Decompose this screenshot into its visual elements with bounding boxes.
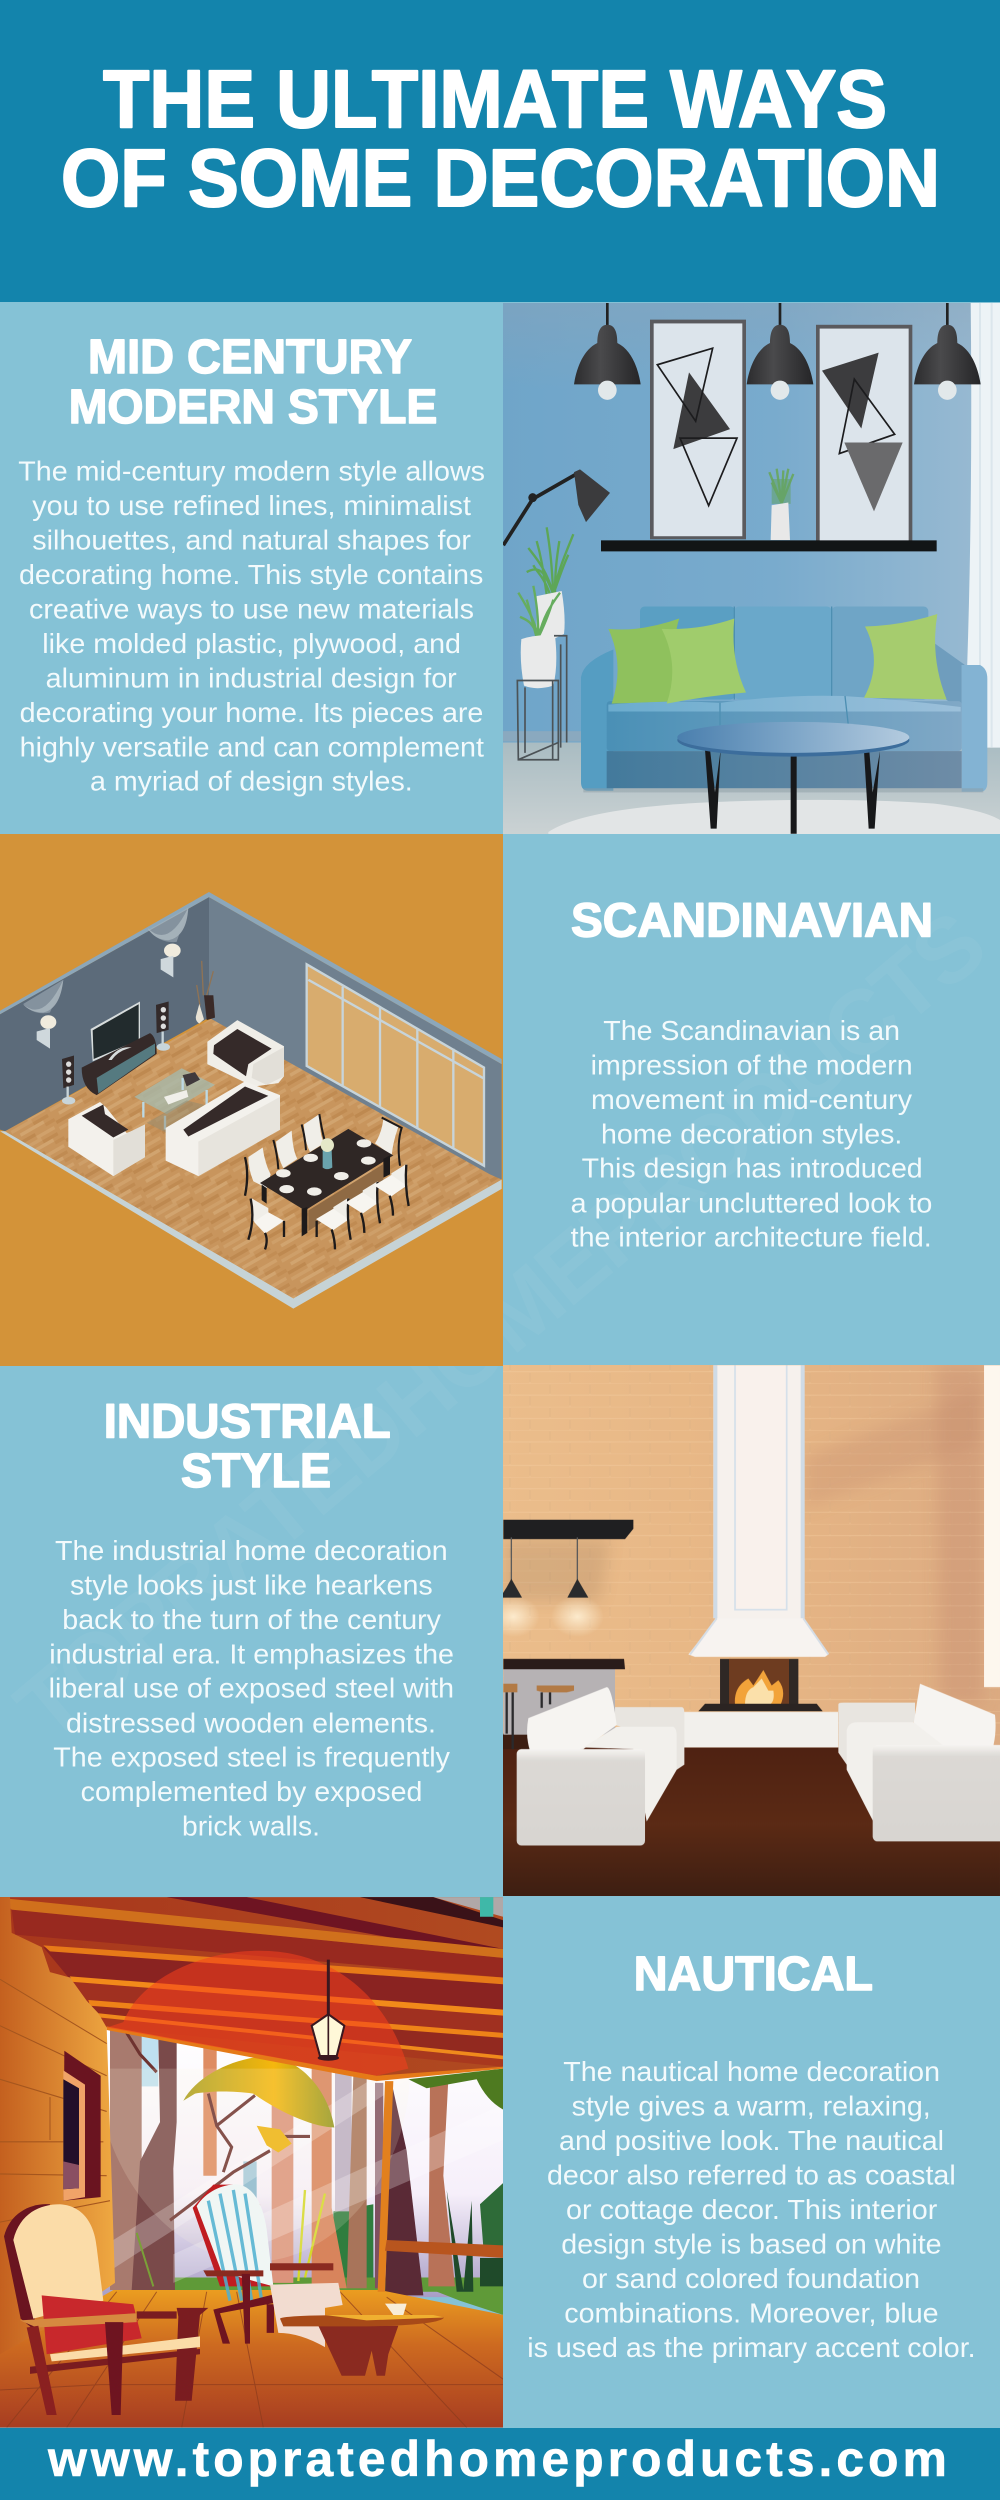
framed art left: [650, 320, 746, 539]
red sun glow over roof: [107, 1951, 408, 2076]
body text: industrial: complemented by exposed: [81, 1776, 422, 1807]
chimney: [688, 1365, 828, 1657]
back row chairs: [245, 1114, 402, 1196]
heading: industrial style: INDUSTRIAL: [104, 1396, 391, 1448]
heading: industrial style: STYLE: [181, 1445, 331, 1498]
body text: scandinavian: [571, 1015, 932, 1253]
armchair lower: [68, 1102, 145, 1176]
floor lamp: [503, 469, 610, 545]
house wall: [0, 1897, 115, 2361]
body text: mid century: [18, 456, 485, 797]
window wall: [307, 964, 484, 1166]
speakers: [62, 1001, 170, 1104]
body text: scandinavian: a popular uncluttered look to: [571, 1187, 932, 1218]
lantern: [312, 1960, 344, 2061]
middle chair with stripes: [193, 2184, 333, 2344]
front chair left: [248, 1198, 284, 1249]
body text: industrial: The industrial home decoration: [55, 1535, 448, 1566]
coffee table: [134, 1068, 220, 1133]
light circle over forest: [110, 2069, 410, 2261]
body text: nautical: style gives a warm, relaxing,: [572, 2091, 931, 2122]
body text: scandinavian: This design has introduced: [582, 1153, 923, 1184]
walls: [0, 892, 502, 1180]
body text: nautical: decor also referred to as coastal: [547, 2160, 956, 2191]
sofa: [581, 606, 987, 792]
porch floor: [0, 2290, 503, 2427]
left sofa: [517, 1687, 684, 1846]
body text: mid century: silhouettes, and natural shapes for: [32, 525, 471, 556]
forest background: [100, 1997, 510, 2315]
shelf: [601, 540, 937, 551]
green pillows: [608, 614, 947, 704]
rug: [548, 800, 1000, 834]
sofa: [166, 1081, 280, 1176]
coffee table: [677, 722, 909, 834]
dining table with chairs: [245, 1114, 409, 1249]
body text: industrial: liberal use of exposed steel with: [49, 1673, 454, 1704]
heading: mid century modern style: MID CENTURY: [88, 331, 412, 384]
round table with cup: [280, 2304, 444, 2376]
body text: mid century: decorating home. This style contains: [19, 559, 483, 590]
body text: mid century: creative ways to use new materials: [29, 594, 474, 625]
fireplace: [698, 1659, 823, 1711]
body text: nautical: or sand colored foundation: [582, 2263, 920, 2294]
body text: nautical: [527, 2056, 976, 2363]
body text: industrial: brick walls.: [182, 1811, 320, 1842]
body text: scandinavian: impression of the modern: [591, 1049, 913, 1080]
body text: mid century: a myriad of design styles.: [90, 766, 413, 797]
framed art right: [816, 325, 912, 542]
website url: www.topratedhomeproducts.com: [47, 2431, 947, 2487]
bar counter and stools: [503, 1659, 625, 1749]
wall lamps: [23, 907, 188, 1049]
armchair upper: [207, 1020, 284, 1087]
window edge: [984, 1365, 1000, 1687]
panel: mid century modern style text: [18, 331, 485, 797]
tree branches: [127, 2033, 310, 2220]
body text: industrial: style looks just like hearkens: [70, 1569, 433, 1600]
image: industrial room with fireplace: [487, 1360, 1000, 1901]
body text: industrial: The exposed steel is frequently: [53, 1742, 450, 1773]
panel: scandinavian text: [571, 894, 933, 1253]
title: OF SOME DECORATION: [61, 133, 940, 224]
shelf vase: [769, 469, 793, 540]
curtain: [964, 300, 1000, 748]
yellow foliage: [183, 2056, 334, 2152]
left chair: [4, 2204, 208, 2415]
tree trunks: [110, 2029, 455, 2295]
body text: nautical: and positive look. The nautical: [559, 2125, 944, 2156]
panel: nautical text: [527, 1948, 976, 2363]
title: THE ULTIMATE WAYS: [103, 54, 887, 145]
body text: mid century: The mid-century modern style allows: [18, 456, 485, 487]
body text: industrial: distressed wooden elements.: [66, 1707, 436, 1738]
heading: scandinavian: SCANDINAVIAN: [571, 894, 933, 948]
body text: industrial: [49, 1535, 454, 1842]
body text: mid century: aluminum in industrial design for: [46, 662, 457, 693]
body text: mid century: you to use refined lines, minimalist: [32, 490, 471, 521]
blanket: [270, 2283, 343, 2347]
body text: industrial: industrial era. It emphasizes the: [49, 1638, 454, 1669]
body text: nautical: design style is based on white: [561, 2228, 942, 2259]
body text: nautical: is used as the primary accent color.: [527, 2332, 976, 2363]
vases: [196, 961, 215, 1024]
body text: nautical: or cottage decor. This interior: [566, 2194, 937, 2225]
front chair row: [316, 1164, 409, 1249]
body text: industrial: back to the turn of the century: [62, 1604, 441, 1635]
body text: scandinavian: the interior architecture field.: [571, 1222, 932, 1253]
body text: nautical: combinations. Moreover, blue: [564, 2298, 939, 2329]
hearth plinth: [684, 1712, 838, 1747]
image: isometric scandinavian room: [0, 830, 503, 1381]
heading: mid century modern style: MODERN STYLE: [69, 381, 437, 434]
image: nautical porch cartoon: [0, 1897, 510, 2427]
image: blue living room with sofa: [500, 300, 1000, 842]
tv and stand: [82, 1001, 157, 1095]
body text: nautical: The nautical home decoration: [563, 2056, 940, 2087]
heading: industrial style: [104, 1396, 391, 1498]
plants and stands: [517, 527, 573, 760]
body text: scandinavian: The Scandinavian is an: [603, 1015, 900, 1046]
body text: mid century: like molded plastic, plywood, and: [42, 628, 461, 659]
panel: industrial style text: [49, 1396, 454, 1842]
watermark: TOPRATEDHOMEPRODUCTS: [0, 892, 1000, 1760]
body text: mid century: decorating your home. Its pieces are: [20, 697, 483, 728]
roof beams: [0, 1897, 503, 2081]
footer band with website: [0, 2428, 1000, 2500]
pendant lamps: [574, 300, 981, 400]
body text: scandinavian: movement in mid-century: [591, 1084, 912, 1115]
right sofa: [838, 1684, 1000, 1841]
heading: mid century modern style: [69, 331, 437, 434]
sun rays: [113, 1997, 503, 2283]
title: [61, 54, 940, 224]
heading: nautical: NAUTICAL: [634, 1948, 873, 2001]
body text: mid century: highly versatile and can complement: [20, 731, 484, 762]
header band with title: [0, 0, 1000, 302]
porch post and rail: [378, 2081, 503, 2292]
floor: [500, 1747, 1000, 1901]
floor: [0, 1018, 502, 1309]
body text: scandinavian: home decoration styles.: [601, 1118, 902, 1149]
wall shelf and pendant lights: [503, 1520, 634, 1634]
